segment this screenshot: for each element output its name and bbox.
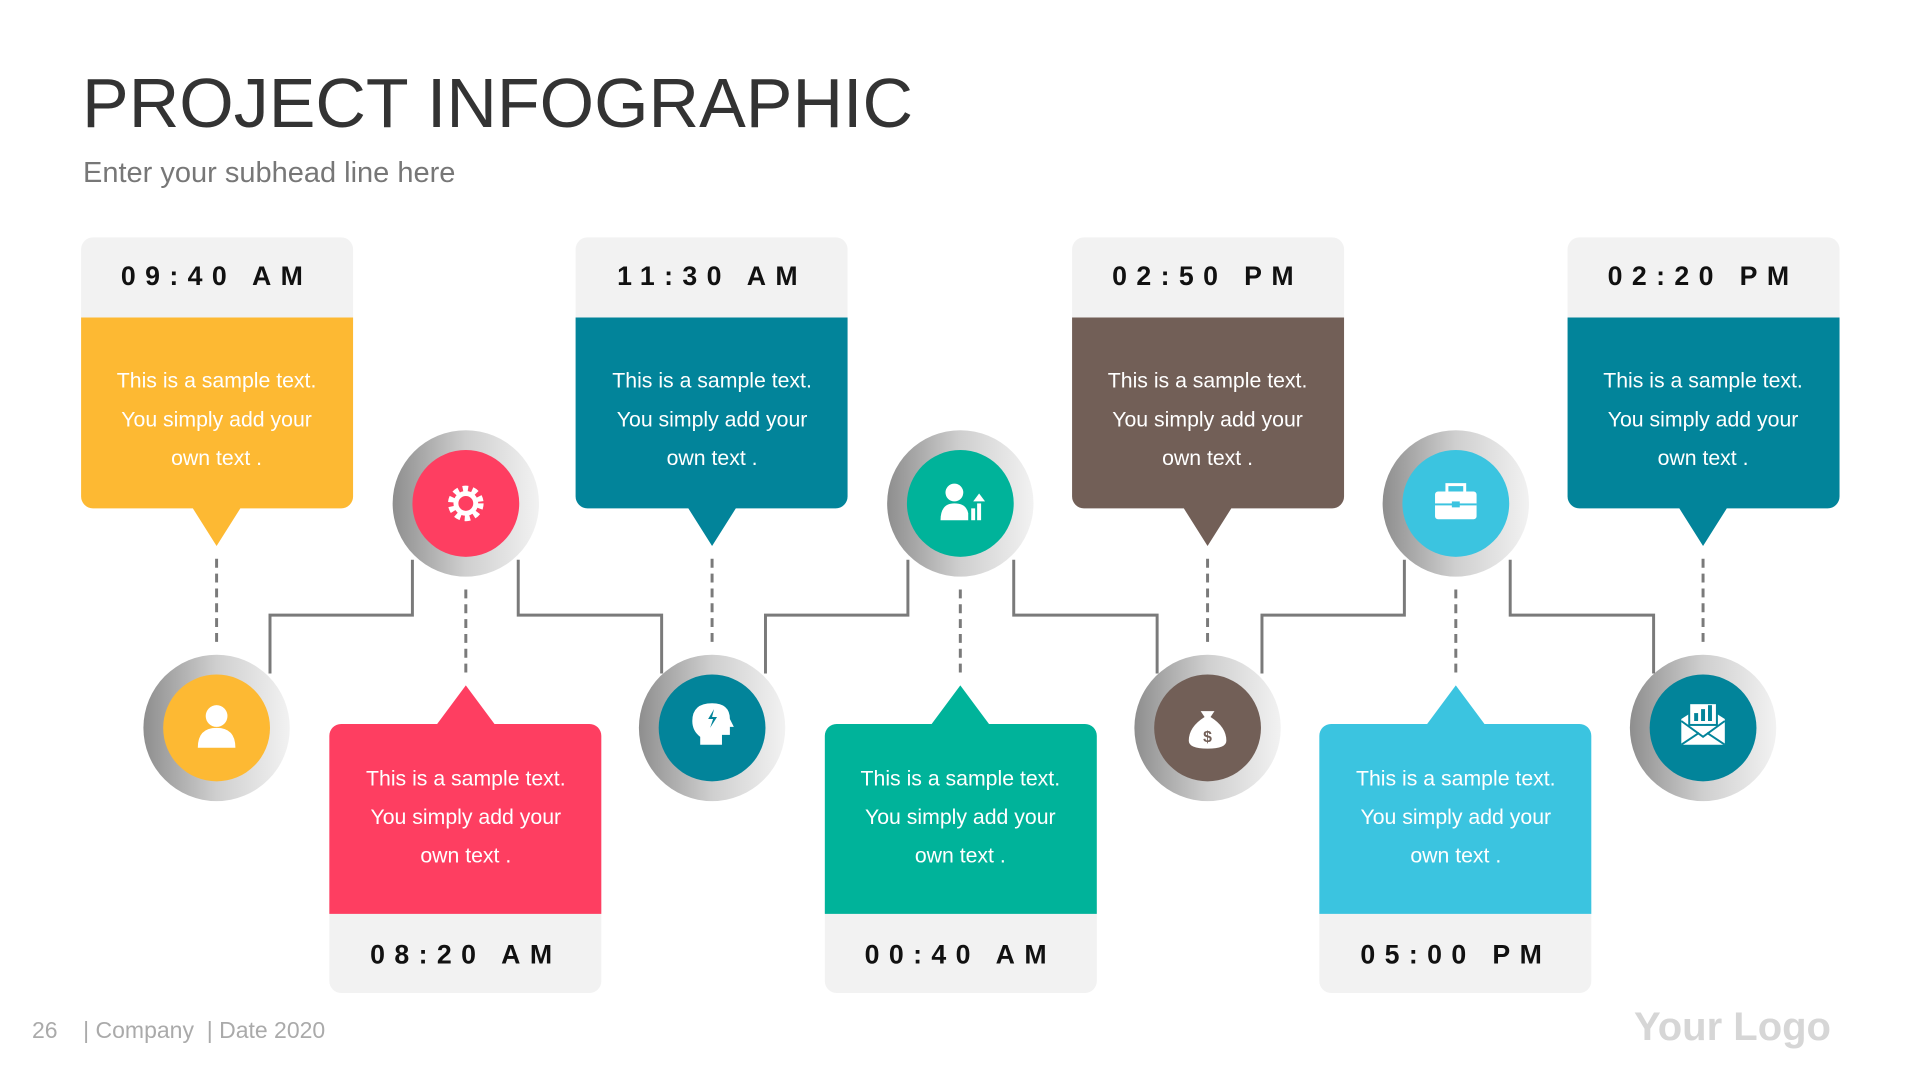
card: 11:30 AM: own text . — [667, 446, 758, 470]
dashed lines — [217, 559, 1703, 675]
card: 02:50 PM: 02:50 PM — [1112, 261, 1303, 291]
card: 02:50 PM — [1072, 237, 1344, 546]
card: 02:20 PM: You simply add your — [1608, 407, 1798, 431]
connector lines — [270, 560, 1654, 674]
card: 00:40 AM: You simply add your — [865, 805, 1056, 829]
icon: head — [639, 655, 785, 801]
card: 05:00 PM: You simply add your — [1361, 805, 1551, 829]
diagram — [81, 237, 1840, 993]
card: 08:20 AM — [329, 685, 601, 993]
card: 00:40 AM: 00:40 AM — [865, 939, 1056, 969]
icon: money bag — [1134, 655, 1281, 801]
card: 08:20 AM: 08:20 AM — [370, 939, 561, 969]
card: 02:20 PM — [1568, 237, 1840, 546]
icon: gear — [393, 430, 539, 577]
card: 05:00 PM: own text . — [1410, 843, 1501, 867]
icon: businessman chart — [887, 430, 1034, 577]
card: 02:20 PM: own text . — [1658, 446, 1749, 470]
card: 00:40 AM: This is a sample text. — [861, 766, 1060, 790]
icon: money bag: $ — [1203, 729, 1212, 746]
logo: Your Logo — [1634, 1005, 1831, 1049]
card: 05:00 PM: 05:00 PM — [1360, 939, 1551, 969]
card: 00:40 AM — [825, 685, 1097, 993]
card: 11:30 AM: This is a sample text. — [612, 369, 812, 393]
icon: briefcase — [1383, 430, 1529, 577]
card: 02:20 PM: 02:20 PM — [1608, 261, 1798, 291]
icon: person — [143, 655, 290, 801]
card: 11:30 AM: 11:30 AM — [617, 261, 807, 291]
card: 09:40 AM: own text . — [171, 446, 262, 470]
card: 09:40 AM — [81, 237, 353, 546]
card: 09:40 AM: This is a sample text. — [117, 369, 316, 393]
card: 08:20 AM: This is a sample text. — [366, 766, 566, 790]
card: 11:30 AM — [576, 237, 848, 546]
footer: 26 | Company | Date 2020 — [32, 1017, 325, 1043]
card: 02:50 PM: own text . — [1162, 446, 1253, 470]
card: 02:20 PM: This is a sample text. — [1603, 369, 1803, 393]
card: 11:30 AM: You simply add your — [617, 407, 807, 431]
card: 02:50 PM: You simply add your — [1112, 407, 1303, 431]
card: 09:40 AM: 09:40 AM — [121, 261, 312, 291]
title: PROJECT INFOGRAPHIC — [82, 64, 913, 142]
card: 02:50 PM: This is a sample text. — [1108, 369, 1307, 393]
card: 09:40 AM: You simply add your — [121, 407, 312, 431]
card: 08:20 AM: own text . — [420, 843, 511, 867]
card: 05:00 PM — [1319, 685, 1591, 993]
icon: envelope chart — [1630, 655, 1776, 801]
card: 05:00 PM: This is a sample text. — [1356, 766, 1556, 790]
subhead: Enter your subhead line here — [83, 157, 455, 189]
card: 00:40 AM: own text . — [915, 843, 1006, 867]
card: 08:20 AM: You simply add your — [371, 805, 561, 829]
